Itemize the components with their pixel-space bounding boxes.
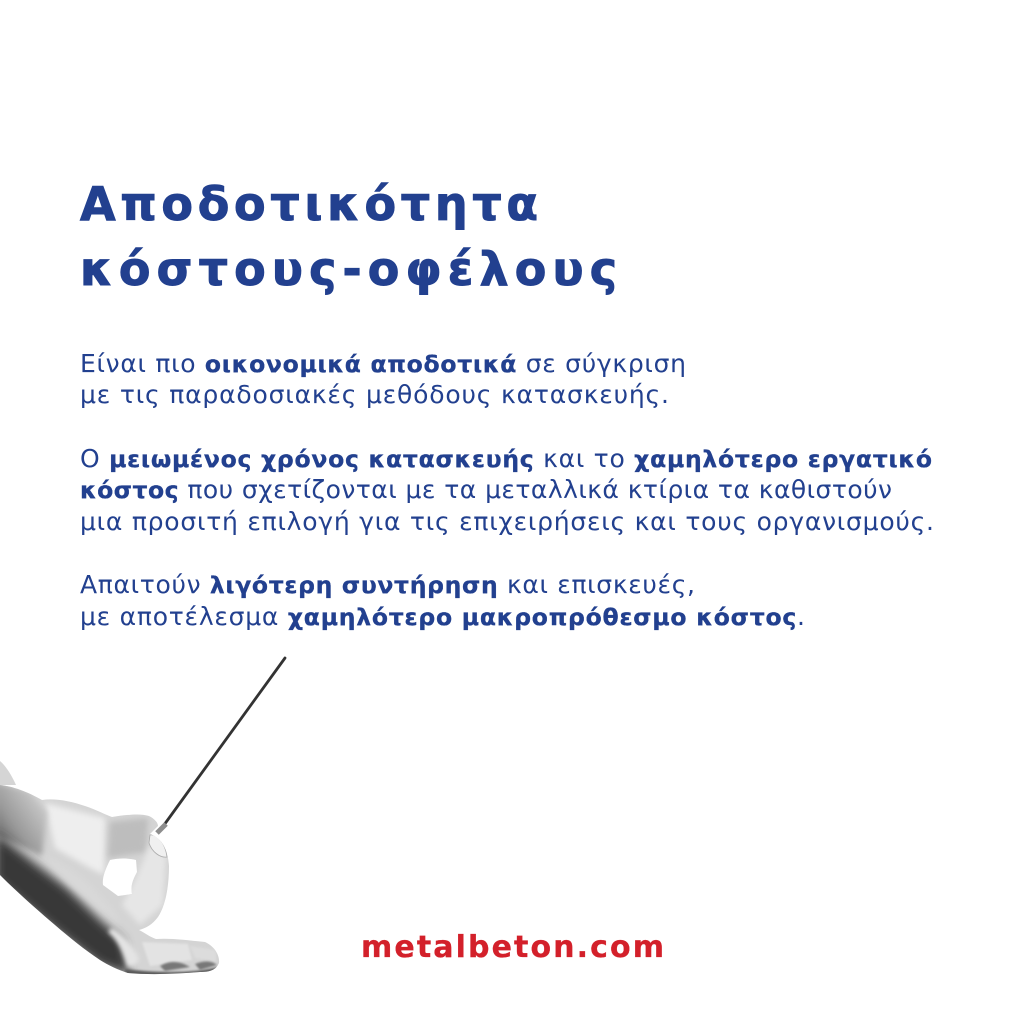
knuckle shade: [108, 818, 148, 858]
lower fingers: [142, 942, 192, 966]
baton: [157, 658, 285, 833]
middle finger light: [51, 866, 100, 908]
text block: paragraph 2: κόστος που σχετίζονται με τα μεταλλικά κτίρια τα καθιστούν: [80, 475, 892, 504]
forearm fragment: [0, 761, 16, 785]
text block: paragraph 2: μια προσιτή επιλογή για τις επιχειρήσεις και τους οργανισμούς.: [80, 507, 934, 536]
text block: paragraph 2: [80, 444, 934, 536]
title: Αποδοτικότητα: [80, 177, 538, 231]
hand: [0, 785, 219, 974]
finger creases: [160, 961, 217, 971]
text block: paragraph 3: με αποτέλεσμα χαμηλότερο μακροπρόθεσμο κόστος.: [80, 602, 805, 631]
palm highlight: [45, 803, 105, 875]
text block: paragraph 1: [80, 349, 686, 409]
index finger light: [108, 928, 139, 967]
lower finger shadow: [124, 966, 218, 974]
upper finger: [0, 782, 47, 856]
icon: hand holding a baton: [0, 658, 285, 985]
website url: metalbeton.com: [361, 930, 664, 965]
text block: paragraph 1: με τις παραδοσιακές μεθόδους κατασκευής.: [80, 380, 669, 409]
title: κόστους-οφέλους: [80, 242, 617, 296]
text block: paragraph 3: Απαιτούν λιγότερη συντήρηση και επισκευές,: [80, 570, 695, 599]
thumbnail: [149, 835, 167, 857]
text block: paragraph 2: Ο μειωμένος χρόνος κατασκευής και το χαμηλότερο εργατικό: [80, 444, 932, 473]
text block: paragraph 3: [80, 570, 805, 631]
dark lower palm: [0, 832, 130, 975]
text block: paragraph 1: Είναι πιο οικονομικά αποδοτικά σε σύγκριση: [80, 349, 686, 378]
title: [80, 177, 617, 296]
thumb highlight: [122, 845, 166, 925]
